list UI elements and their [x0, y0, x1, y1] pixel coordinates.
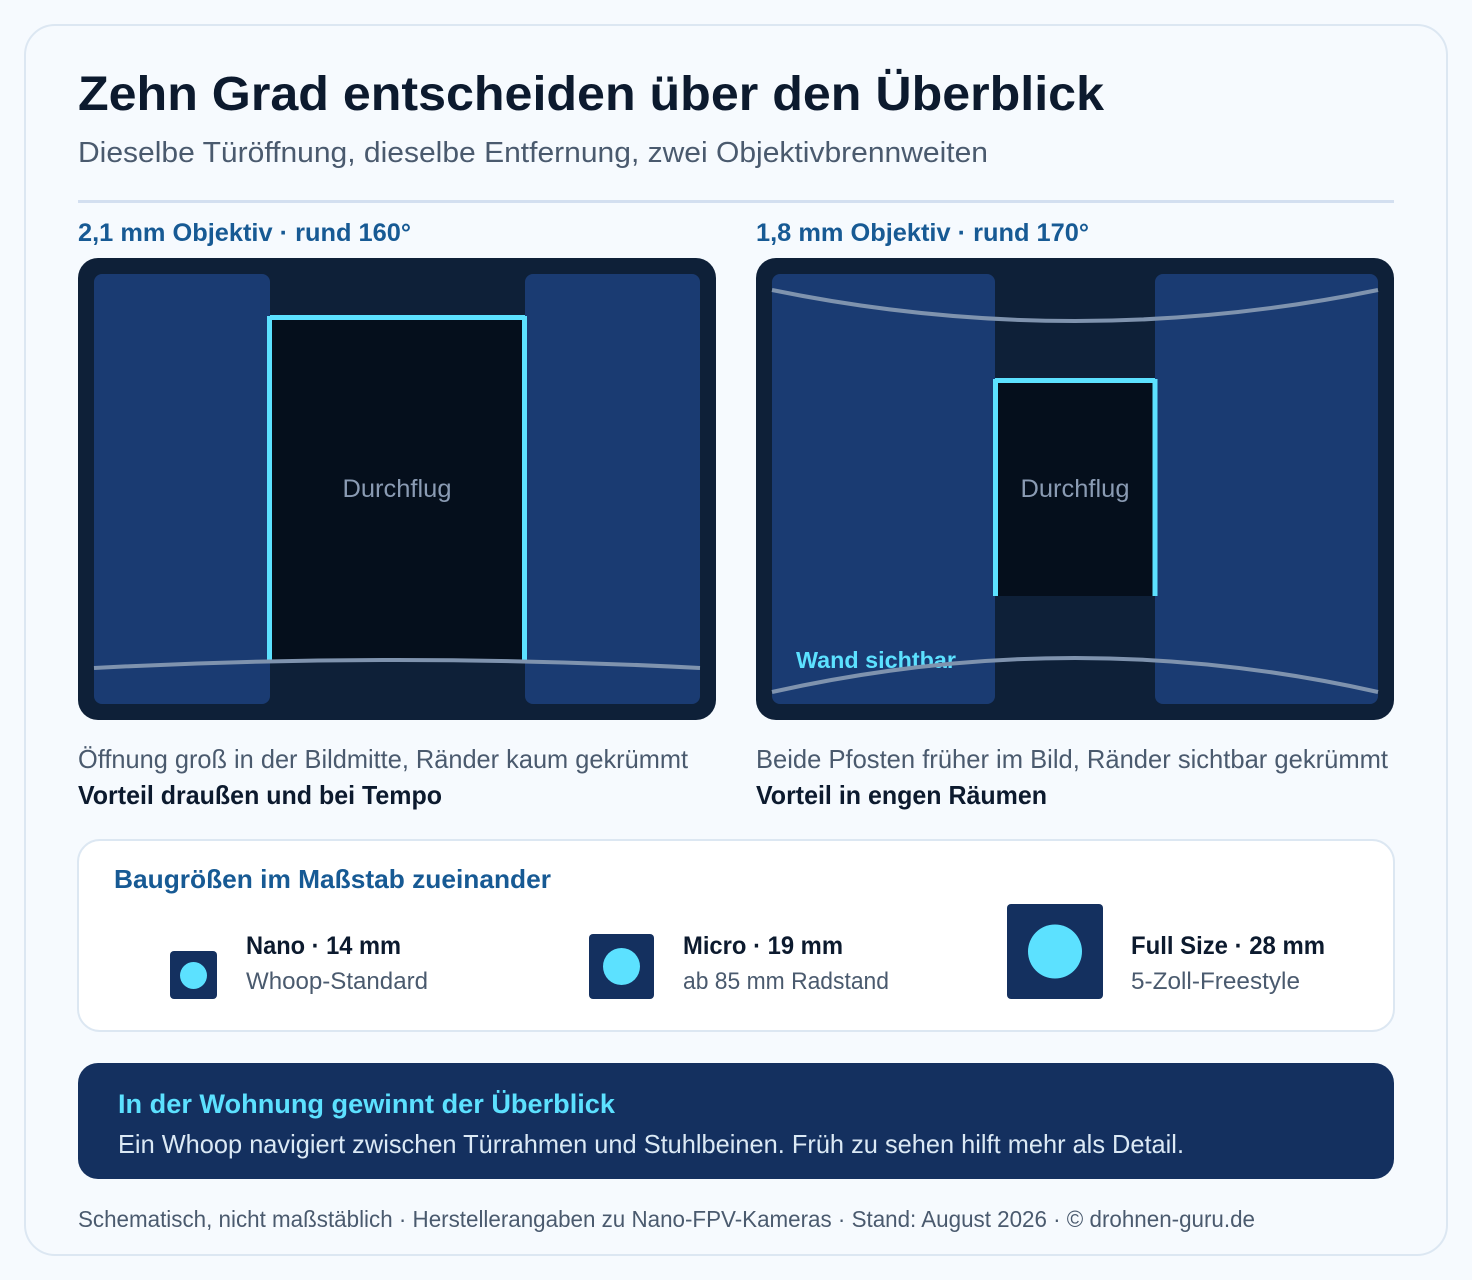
floor curve: [772, 658, 1378, 692]
full size label: Full Size · 28 mm: [1131, 932, 1325, 960]
icon: full size frame: [1007, 904, 1103, 999]
ceiling curve: [772, 290, 1378, 321]
size item: Micro: [589, 932, 889, 999]
panel: frame sizes: [78, 840, 1394, 1031]
door frame: [270, 316, 525, 660]
micro note: ab 85 mm Radstand: [683, 968, 889, 995]
icon: nano frame: [170, 951, 217, 999]
callout heading: In der Wohnung gewinnt der Überblick: [118, 1089, 616, 1119]
caption: 2,1 mm: Öffnung groß in der Bildmitte, Ränder kaum gekrümmt: [78, 744, 689, 774]
micro label: Micro · 19 mm: [683, 932, 843, 960]
door frame: [995, 379, 1155, 596]
panel: 2,1 mm lens: [78, 219, 716, 810]
footer: Schematisch, nicht maßstäblich · Herstellerangaben zu Nano-FPV-Kameras · Stand: August 2026 · © drohnen-guru.de: [78, 1206, 1255, 1232]
door label: Durchflug: [342, 475, 452, 503]
scene: 160 degree view: [78, 258, 716, 720]
panel heading: 1,8 mm: 1,8 mm Objektiv · rund 170°: [756, 219, 1089, 247]
icon: micro frame: [589, 934, 654, 999]
callout: [78, 1063, 1394, 1179]
door opening: [270, 318, 525, 660]
title: Zehn Grad entscheiden über den Überblick: [78, 68, 1104, 121]
subtitle: Dieselbe Türöffnung, dieselbe Entfernung, zwei Objektivbrennweiten: [78, 137, 988, 169]
callout text: Ein Whoop navigiert zwischen Türrahmen und Stuhlbeinen. Früh zu sehen hilft mehr als Detail.: [118, 1129, 1184, 1159]
left wall: [772, 274, 995, 704]
size item: Full Size: [1007, 904, 1325, 999]
full size note: 5-Zoll-Freestyle: [1131, 968, 1300, 995]
nano note: Whoop-Standard: [246, 968, 428, 995]
scene: 170 degree view: [756, 258, 1394, 720]
benefit: 2,1 mm: Vorteil draußen und bei Tempo: [78, 780, 442, 810]
nano label: Nano · 14 mm: [246, 932, 401, 960]
right wall: [1155, 274, 1378, 704]
benefit: 1,8 mm: Vorteil in engen Räumen: [756, 780, 1047, 810]
panel: 1,8 mm lens: [756, 219, 1394, 810]
panel heading: 2,1 mm: 2,1 mm Objektiv · rund 160°: [78, 219, 411, 247]
size item: Nano: [170, 932, 428, 999]
left wall: [94, 274, 270, 704]
sizes heading: Baugrößen im Maßstab zueinander: [114, 864, 551, 894]
right wall: [525, 274, 700, 704]
floor curve: [94, 660, 700, 668]
door label: Durchflug: [1020, 475, 1130, 503]
wall label: Wand sichtbar: [796, 647, 956, 673]
caption: 1,8 mm: Beide Pfosten früher im Bild, Ränder sichtbar gekrümmt: [756, 744, 1389, 774]
door opening: [995, 381, 1155, 596]
